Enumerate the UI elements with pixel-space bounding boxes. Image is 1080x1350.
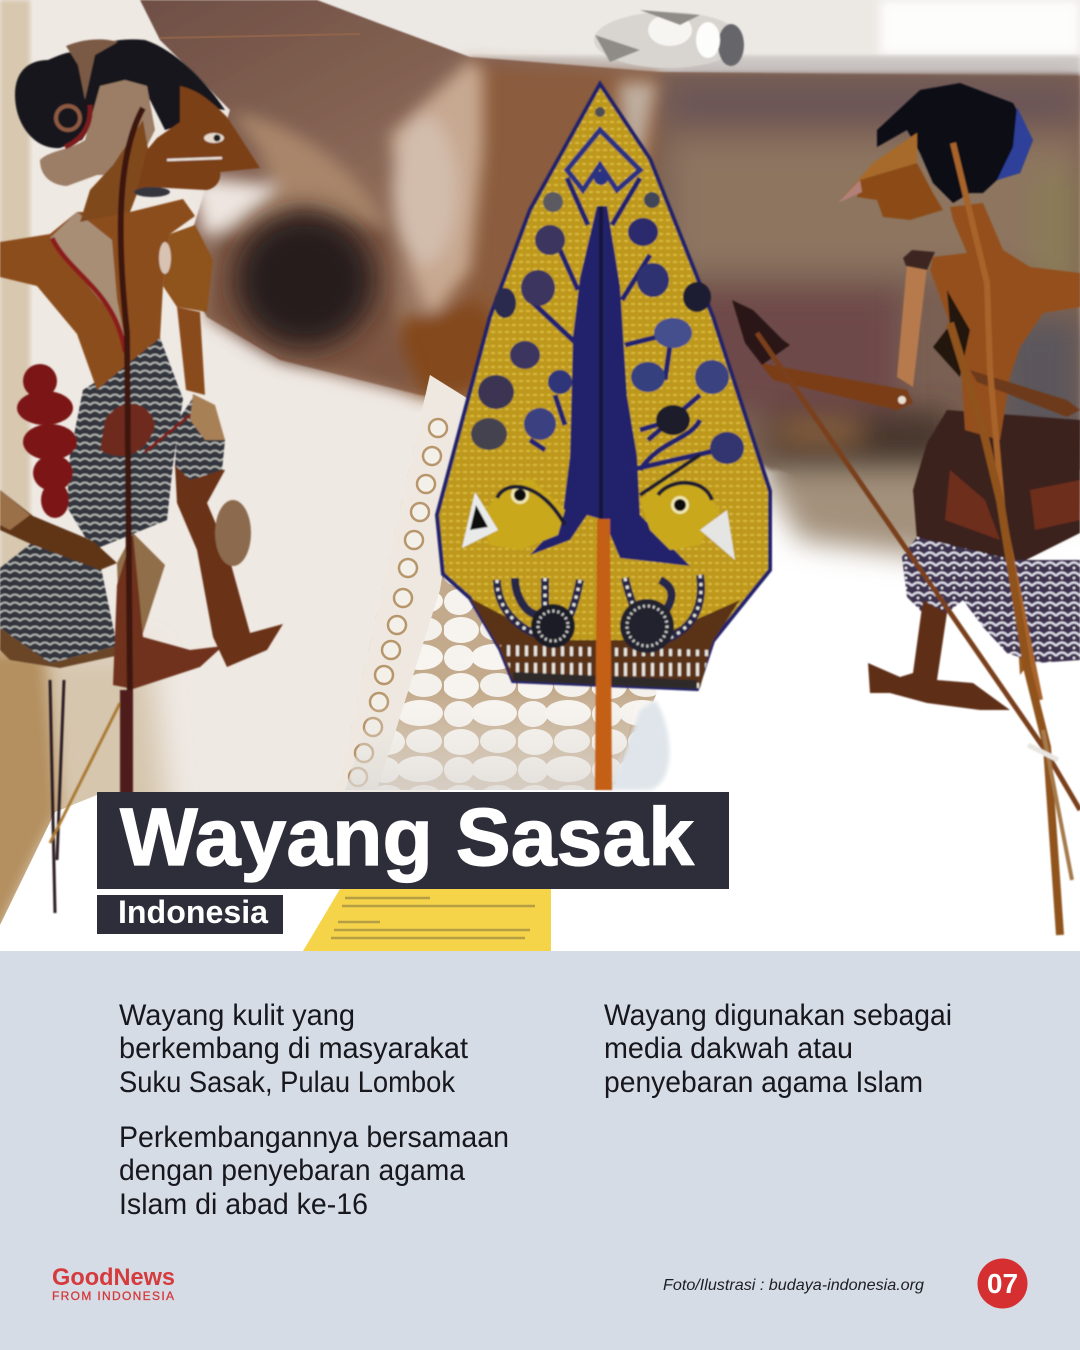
brown shade shapes	[140, 0, 1080, 486]
logo: GoodNews from Indonesia: FROM INDONESIA	[52, 1289, 174, 1303]
head: forehead and face	[838, 133, 917, 203]
right puppet	[732, 83, 1080, 935]
hand	[732, 300, 790, 365]
background tonal patches	[670, 85, 1080, 560]
text block: history: Islam di abad ke-16	[119, 1188, 368, 1221]
logo: GoodNews from Indonesia	[52, 1264, 175, 1303]
front leg	[175, 465, 283, 667]
head: hair	[877, 83, 1033, 203]
photo: three Sasak wayang puppets on display	[0, 0, 1080, 951]
batik torso	[67, 338, 183, 550]
top pale ceiling	[300, 0, 1080, 76]
dragon heads	[480, 478, 565, 550]
ornament and curl	[40, 80, 155, 186]
text block: history	[119, 1121, 509, 1221]
text block: purpose	[604, 999, 952, 1099]
thin rods	[50, 680, 64, 913]
branches	[530, 178, 727, 470]
rear leg	[113, 533, 223, 689]
dark upper skirt	[913, 410, 1080, 563]
sash	[0, 490, 117, 570]
text block: community	[119, 999, 469, 1099]
carved batik cloth	[337, 375, 669, 790]
page number badge: 07	[987, 1268, 1018, 1299]
yellow caption card	[303, 889, 551, 951]
lower skirt batik	[0, 542, 117, 663]
second forearm	[970, 370, 1080, 417]
wall and table	[0, 0, 440, 951]
logo: GoodNews from Indonesia: GoodNews	[52, 1264, 175, 1291]
hair	[15, 39, 225, 148]
flower dots	[471, 192, 744, 464]
tree trunk	[530, 206, 690, 566]
rods	[757, 333, 1080, 810]
main rod	[121, 108, 143, 700]
leg and foot	[868, 600, 1010, 710]
red hanging ornament	[17, 364, 77, 518]
hand and forearm	[163, 225, 213, 312]
patterned skirt	[902, 537, 1080, 663]
torso and arm	[0, 199, 195, 390]
gunungan puppet	[437, 84, 770, 790]
subtitle box: Indonesia	[118, 894, 268, 930]
glass ornament top	[594, 10, 744, 68]
text block: community: berkembang di masyarakat	[119, 1032, 469, 1065]
second hand	[933, 290, 970, 377]
photo credit: Foto/Ilustrasi : budaya-indonesia.org	[663, 1277, 924, 1294]
forearm	[760, 363, 913, 410]
neck	[80, 120, 150, 222]
neck and torso	[930, 203, 1080, 440]
text block: community: Suku Sasak, Pulau Lombok	[119, 1066, 456, 1099]
upper arm	[897, 263, 927, 387]
text block: purpose: Wayang digunakan sebagai	[604, 999, 952, 1032]
text block: purpose: media dakwah atau	[604, 1032, 853, 1065]
face	[137, 86, 260, 190]
left puppet	[0, 39, 283, 913]
text block: history: Perkembangannya bersamaan	[119, 1121, 509, 1154]
text block: community: Wayang kulit yang	[119, 999, 355, 1032]
plume arcs	[497, 575, 701, 640]
text block: history: dengan penyebaran agama	[119, 1154, 465, 1187]
stone tones	[385, 60, 657, 395]
orange central rod	[595, 519, 612, 790]
text block: purpose: penyebaran agama Islam	[604, 1066, 923, 1099]
page number badge	[978, 1258, 1028, 1308]
rear leg bit	[1013, 567, 1037, 675]
lower band	[470, 598, 740, 689]
right hanging cloth	[175, 395, 225, 480]
title box: Wayang Sasak	[120, 792, 694, 883]
tan arc and dark blob	[190, 112, 420, 395]
text panel background	[0, 951, 1080, 1350]
